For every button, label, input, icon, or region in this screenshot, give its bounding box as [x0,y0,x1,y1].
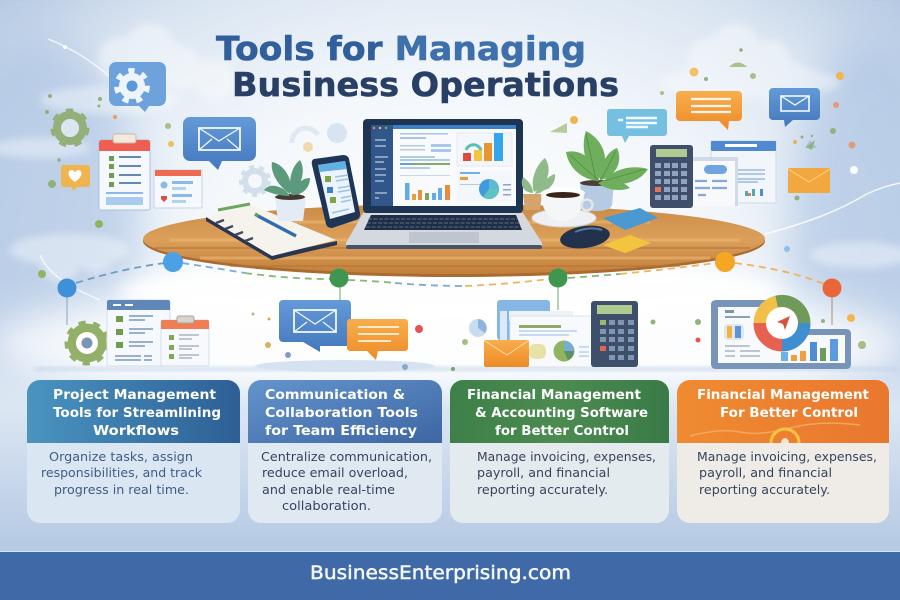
heading: project management: Project Management [53,388,216,403]
icon: notebook [206,204,337,260]
icon: mail bubble [183,117,256,170]
footer text: BusinessEnterprising.com [310,562,571,584]
heading: accounting [467,388,648,439]
text: project management description [41,449,203,497]
title: Tools for Managing [216,29,586,68]
text: communication description [261,449,432,513]
heading: accounting: & Accounting Software [475,406,648,421]
text: communication description: collaboration. [282,498,371,513]
heading: project management [53,388,221,439]
icon: faded gear and globe [241,123,347,195]
text: accounting description: reporting accurately. [477,482,608,497]
icon: coffee cup [532,188,596,227]
heading: communication: for Team Efficiency [265,424,418,439]
connector: dashed timeline [76,263,824,286]
text: project management description: Organize tasks, assign [49,449,193,464]
icon: large plant [566,131,648,211]
footer bar [0,551,900,600]
laptop [346,119,542,249]
title [216,29,619,104]
table [143,204,765,277]
text: communication description: Centralize communication, [261,449,432,464]
heading: accounting: for Better Control [495,424,629,439]
icon set: project management [67,300,209,366]
icon: orange chat bubble [676,91,742,130]
text: communication description: and enable real-time [262,482,395,497]
heading: communication [265,388,418,439]
heading: financial: Financial Management [697,388,869,403]
icon: orange envelope [788,168,830,193]
heading: project management: Tools for Streamlining [53,406,221,421]
timeline nodes [58,252,842,325]
icon: mouse [559,223,611,251]
icon: blue notepad [603,208,658,230]
icon: report window [711,141,776,203]
icon: small plant [264,160,310,221]
icon: settings gear bubble [109,62,166,112]
heading: communication: Communication & [265,388,405,403]
laptop screen [363,119,523,213]
heading: accounting: Financial Management [467,388,641,403]
text: project management description: progress in real time. [54,482,189,497]
panel: communication tools [248,380,442,523]
icon: small plant behind cup [522,158,555,210]
icon: yellow sticky note [603,235,651,253]
ground band [35,360,900,372]
panel: financial management [677,380,889,523]
text: communication description: reduce email overload, [262,465,408,480]
icon: blue mail bubble [769,88,820,127]
text: financial description: Manage invoicing, expenses, [697,449,877,464]
panel: project management tools [27,380,240,523]
panel: accounting software [450,380,669,523]
icon set: analytics dashboard [695,300,866,369]
icon: small contact card [154,170,202,208]
icon: phone [312,155,360,228]
icon: form card [692,157,738,206]
icon: green gear [53,111,87,145]
icon: heart bubble [61,165,90,191]
laptop base [346,213,542,249]
text: accounting description [477,449,656,497]
heading: financial [697,388,869,421]
text: financial description: reporting accurately. [699,482,830,497]
text: project management description: responsibilities, and track [41,465,203,480]
decorative dots [38,45,858,278]
icon: calculator [650,145,693,208]
heading: financial: For Better Control [720,406,858,421]
heading: project management: Workflows [93,424,179,439]
icon set: communication [252,300,423,370]
text: accounting description: Manage invoicing, expenses, [477,449,656,464]
text: financial description: payroll, and financial [699,465,832,480]
title: Business Operations [232,65,619,104]
heading: communication: Collaboration Tools [265,406,418,421]
icon set: financial [451,300,656,371]
icon: teal chat bubble [607,109,667,143]
text: accounting description: payroll, and financial [477,465,610,480]
icon: task clipboard [99,134,150,210]
text: financial description [697,449,877,497]
